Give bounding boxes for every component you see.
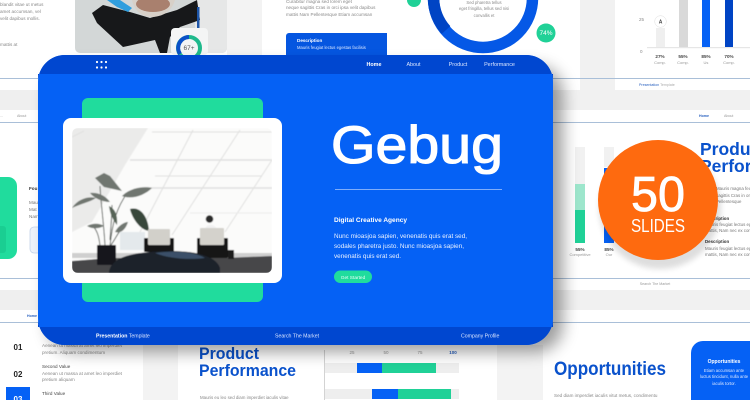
panel: opportunities card: Opportunities — [708, 359, 741, 365]
heading: product performance (bottom): Mauris eu leo sed diam imperdiet iaculis vitae — [200, 395, 289, 400]
main slide card — [38, 55, 553, 345]
floor — [72, 253, 272, 258]
callout: description box: Description — [297, 38, 322, 43]
button: get started: Get Started — [341, 275, 366, 281]
badge: 74% — [536, 24, 556, 42]
nav: mid-left slide: About — [17, 114, 26, 118]
badge: 74%: 74% — [539, 30, 553, 37]
panel: opportunities card: Etiam accumsan ante — [704, 368, 745, 373]
bar chart: mid-right slide: Our — [606, 252, 613, 257]
title: Gebug — [331, 116, 503, 175]
panel: green card, left edge — [0, 177, 17, 259]
panel: numbered list: Third Value — [42, 391, 66, 396]
body text — [334, 233, 467, 260]
panel: numbered list: pretium aliquam — [42, 377, 75, 382]
text: top-left slide copy: blandit vitae ut metus — [0, 2, 44, 7]
bar chart: mid-right slide: 85% — [604, 247, 614, 252]
bar chart: mid-right slide: Search The Market — [640, 282, 670, 286]
bar chart: top-right: 55% — [678, 54, 688, 59]
text: top-left slide copy — [0, 2, 44, 47]
body text: venenatis quis erat sed. — [334, 253, 401, 260]
text: left mid slide: Mat — [29, 207, 37, 212]
nav: mid-left slide: Home — [27, 314, 37, 318]
heading: product performance (bottom): Performance — [199, 361, 296, 380]
text: left mid slide: Fou — [29, 186, 38, 191]
bar chart: top-right: 27% — [655, 54, 665, 59]
footer bar: Search The Market — [275, 334, 320, 340]
gantt chart: 100 — [449, 350, 457, 355]
panel: numbered list: 02 — [14, 370, 23, 379]
bar chart: top-right: Presentation Template — [639, 83, 675, 87]
header bar — [38, 55, 553, 82]
body text: sodales pharetra justo. Nunc mioasjoa sapien, — [334, 243, 464, 250]
panel: numbered list: pretium. Aliquam condimentum — [42, 350, 105, 355]
planter — [97, 245, 116, 265]
bar chart: mid-right slide — [569, 147, 670, 286]
slide: microscope photo — [75, 0, 227, 59]
bar chart: top-right: Comp. — [654, 60, 666, 65]
text: opportunities copy: Sed diam imperdiet iaculis vitut metus, condimentu — [554, 393, 658, 398]
bar chart: top-right: 0 — [640, 49, 643, 54]
icon: dots menu — [96, 61, 107, 69]
button: get started — [334, 270, 372, 283]
badge: 50 slides: 50 — [631, 168, 685, 222]
text: top-centre slide copy — [286, 0, 376, 17]
plant — [94, 186, 126, 246]
gantt chart: 75 — [417, 350, 423, 355]
heading: product performance (bottom) — [199, 344, 296, 400]
text: top-left slide copy: amet accumsan, vel — [0, 9, 41, 14]
gantt chart — [324, 350, 459, 400]
white photo frame — [63, 118, 282, 283]
bar chart: top-right: A — [659, 20, 663, 26]
subheading: Digital Creative Agency — [334, 217, 407, 224]
chair one — [144, 238, 174, 252]
text: left mid slide: Nam — [29, 214, 39, 219]
nav links — [367, 62, 515, 68]
nav: mid-right slide — [699, 114, 733, 118]
panel: numbered list: Second Value — [42, 364, 71, 369]
bar chart: top-right: Comp. — [677, 60, 689, 65]
photo: office interior — [72, 128, 272, 273]
callout: description box: Mauris feugiat lectus egestas facilisis — [297, 45, 366, 50]
bar chart: top-right: Comp. — [723, 60, 735, 65]
bar chart: top-right — [639, 0, 750, 87]
badge: 50 slides — [598, 140, 721, 269]
donut chart: Sed pharetra tellus — [466, 0, 502, 5]
nav: mid-right slide: Home — [699, 114, 709, 118]
text: top-centre slide copy: mattis Nam Pellentesque Etiam accumsan — [286, 12, 373, 17]
donut chart: convallis et — [474, 13, 495, 18]
badge: small green — [407, 0, 421, 7]
nav: mid-left slide — [0, 114, 37, 318]
gantt chart: 25 — [349, 350, 355, 355]
body text: Nunc mioasjoa sapien, venenatis quis erat sed, — [334, 233, 467, 240]
panel: numbered list: Aenean ut massa at amet leo imperdiet — [42, 343, 123, 348]
bar chart: mid-right slide: 55% — [575, 247, 585, 252]
heading: product performance (right) — [700, 139, 750, 176]
nav links: Home — [367, 62, 381, 68]
divider — [335, 188, 502, 191]
text: left mid slide: Mau — [29, 200, 38, 205]
panel: numbered list: Aenean ut massa at amet leo imperdiet — [42, 371, 123, 376]
text: right description copy — [705, 186, 750, 257]
footer bar: Presentation Template — [96, 334, 150, 340]
bar chart: mid-right slide: Competitive — [569, 252, 591, 257]
footer bar — [38, 318, 553, 345]
text: top-left slide copy: velit dapibus mollis. — [0, 16, 40, 21]
gantt chart: 50 — [383, 350, 389, 355]
panel: opportunities card: iaculis tortor. — [712, 381, 736, 386]
text: right description copy: Description — [705, 239, 729, 244]
panel: numbered list — [6, 343, 123, 400]
donut chart: eget fringilla, tellus sed nisi — [459, 6, 509, 11]
nav links: About — [406, 62, 421, 68]
nav links: Performance — [484, 62, 515, 68]
heading: opportunities: Opportunities — [554, 359, 666, 380]
text: top-left slide copy: mattis at — [0, 42, 18, 47]
badge: 50 slides: SLIDES — [631, 215, 685, 236]
text: top-centre slide copy: neque sagittis Cras in orci ipsa velit dapibus — [286, 5, 376, 10]
callout: description box — [286, 33, 387, 55]
text: right description copy: Pellentesque — [716, 199, 742, 204]
panel: opportunities card — [691, 341, 750, 400]
main slide shadow — [48, 66, 563, 352]
heading: product performance (bottom): Product — [199, 344, 259, 363]
ottoman — [109, 251, 220, 273]
text: right description copy: Description — [705, 216, 729, 221]
bar chart: top-right: 70% — [724, 54, 734, 59]
donut chart — [407, 0, 556, 48]
stat card: 67+ donut: 67+ — [183, 45, 195, 52]
panel: opportunities card: luctus tincidunt, nulla ante — [700, 374, 749, 379]
footer bar: Company Profile — [461, 334, 499, 340]
stat card: 67+ donut — [171, 28, 208, 59]
bar chart: top-right: 25 — [639, 17, 645, 22]
nav: mid-right slide: About — [724, 114, 733, 118]
bar chart: top-right: 85% — [701, 54, 711, 59]
panel: left light-blue outline box — [30, 227, 42, 253]
panel: numbered list: 01 — [14, 343, 23, 352]
chair two and seated person — [197, 238, 228, 258]
nav: mid-left slide: ... — [0, 114, 3, 118]
bar chart: top-right: Us — [704, 60, 708, 65]
text: left mid slide — [29, 186, 39, 219]
green backing panel — [82, 98, 263, 302]
nav links: Product — [449, 62, 468, 68]
